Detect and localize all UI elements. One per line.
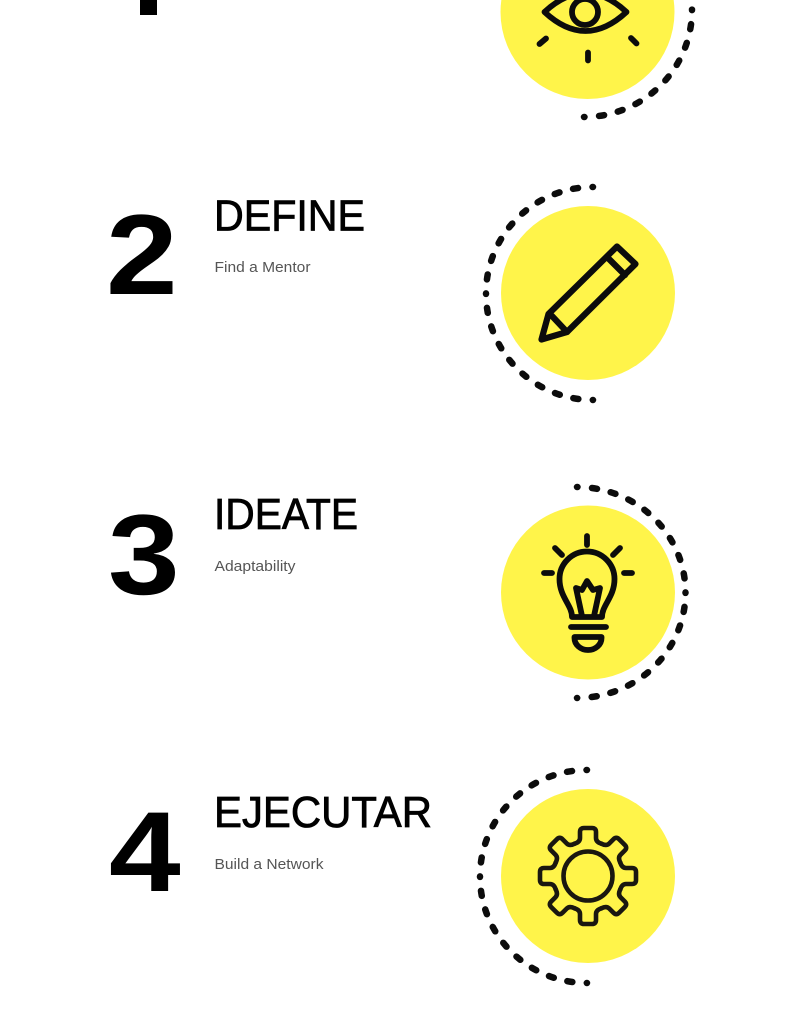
step 4: ejecutar (109, 770, 675, 983)
icon: gear (540, 828, 636, 924)
yellow circle 3 (501, 506, 675, 680)
icon: eye (540, 0, 636, 60)
dashed arc 2 (486, 187, 593, 400)
text: Adaptability: Adaptability (214, 558, 296, 575)
number 4: 4 (109, 788, 181, 915)
step 3: ideate (108, 487, 686, 698)
icon: light bulb (544, 536, 632, 650)
yellow circle 2 (501, 206, 675, 380)
dashed arc 1 (584, 0, 692, 117)
icon: pencil (542, 246, 636, 340)
text: Find a Mentor: Find a Mentor (214, 259, 310, 276)
heading: EJECUTAR: EJECUTAR (214, 788, 432, 837)
heading: IDEATE: IDEATE (214, 490, 358, 539)
step 1: observe (95, 0, 692, 117)
dashed arc 4 (480, 770, 587, 983)
heading: DEFINE: DEFINE (214, 192, 365, 240)
number 2: 2 (106, 191, 178, 318)
yellow circle 4 (501, 789, 675, 963)
yellow circle 1 (500, 0, 674, 99)
dashed arc 3 (577, 487, 686, 698)
text: Build a Network: Build a Network (214, 856, 324, 873)
number 3: 3 (108, 491, 180, 618)
step 2: define (106, 187, 675, 400)
